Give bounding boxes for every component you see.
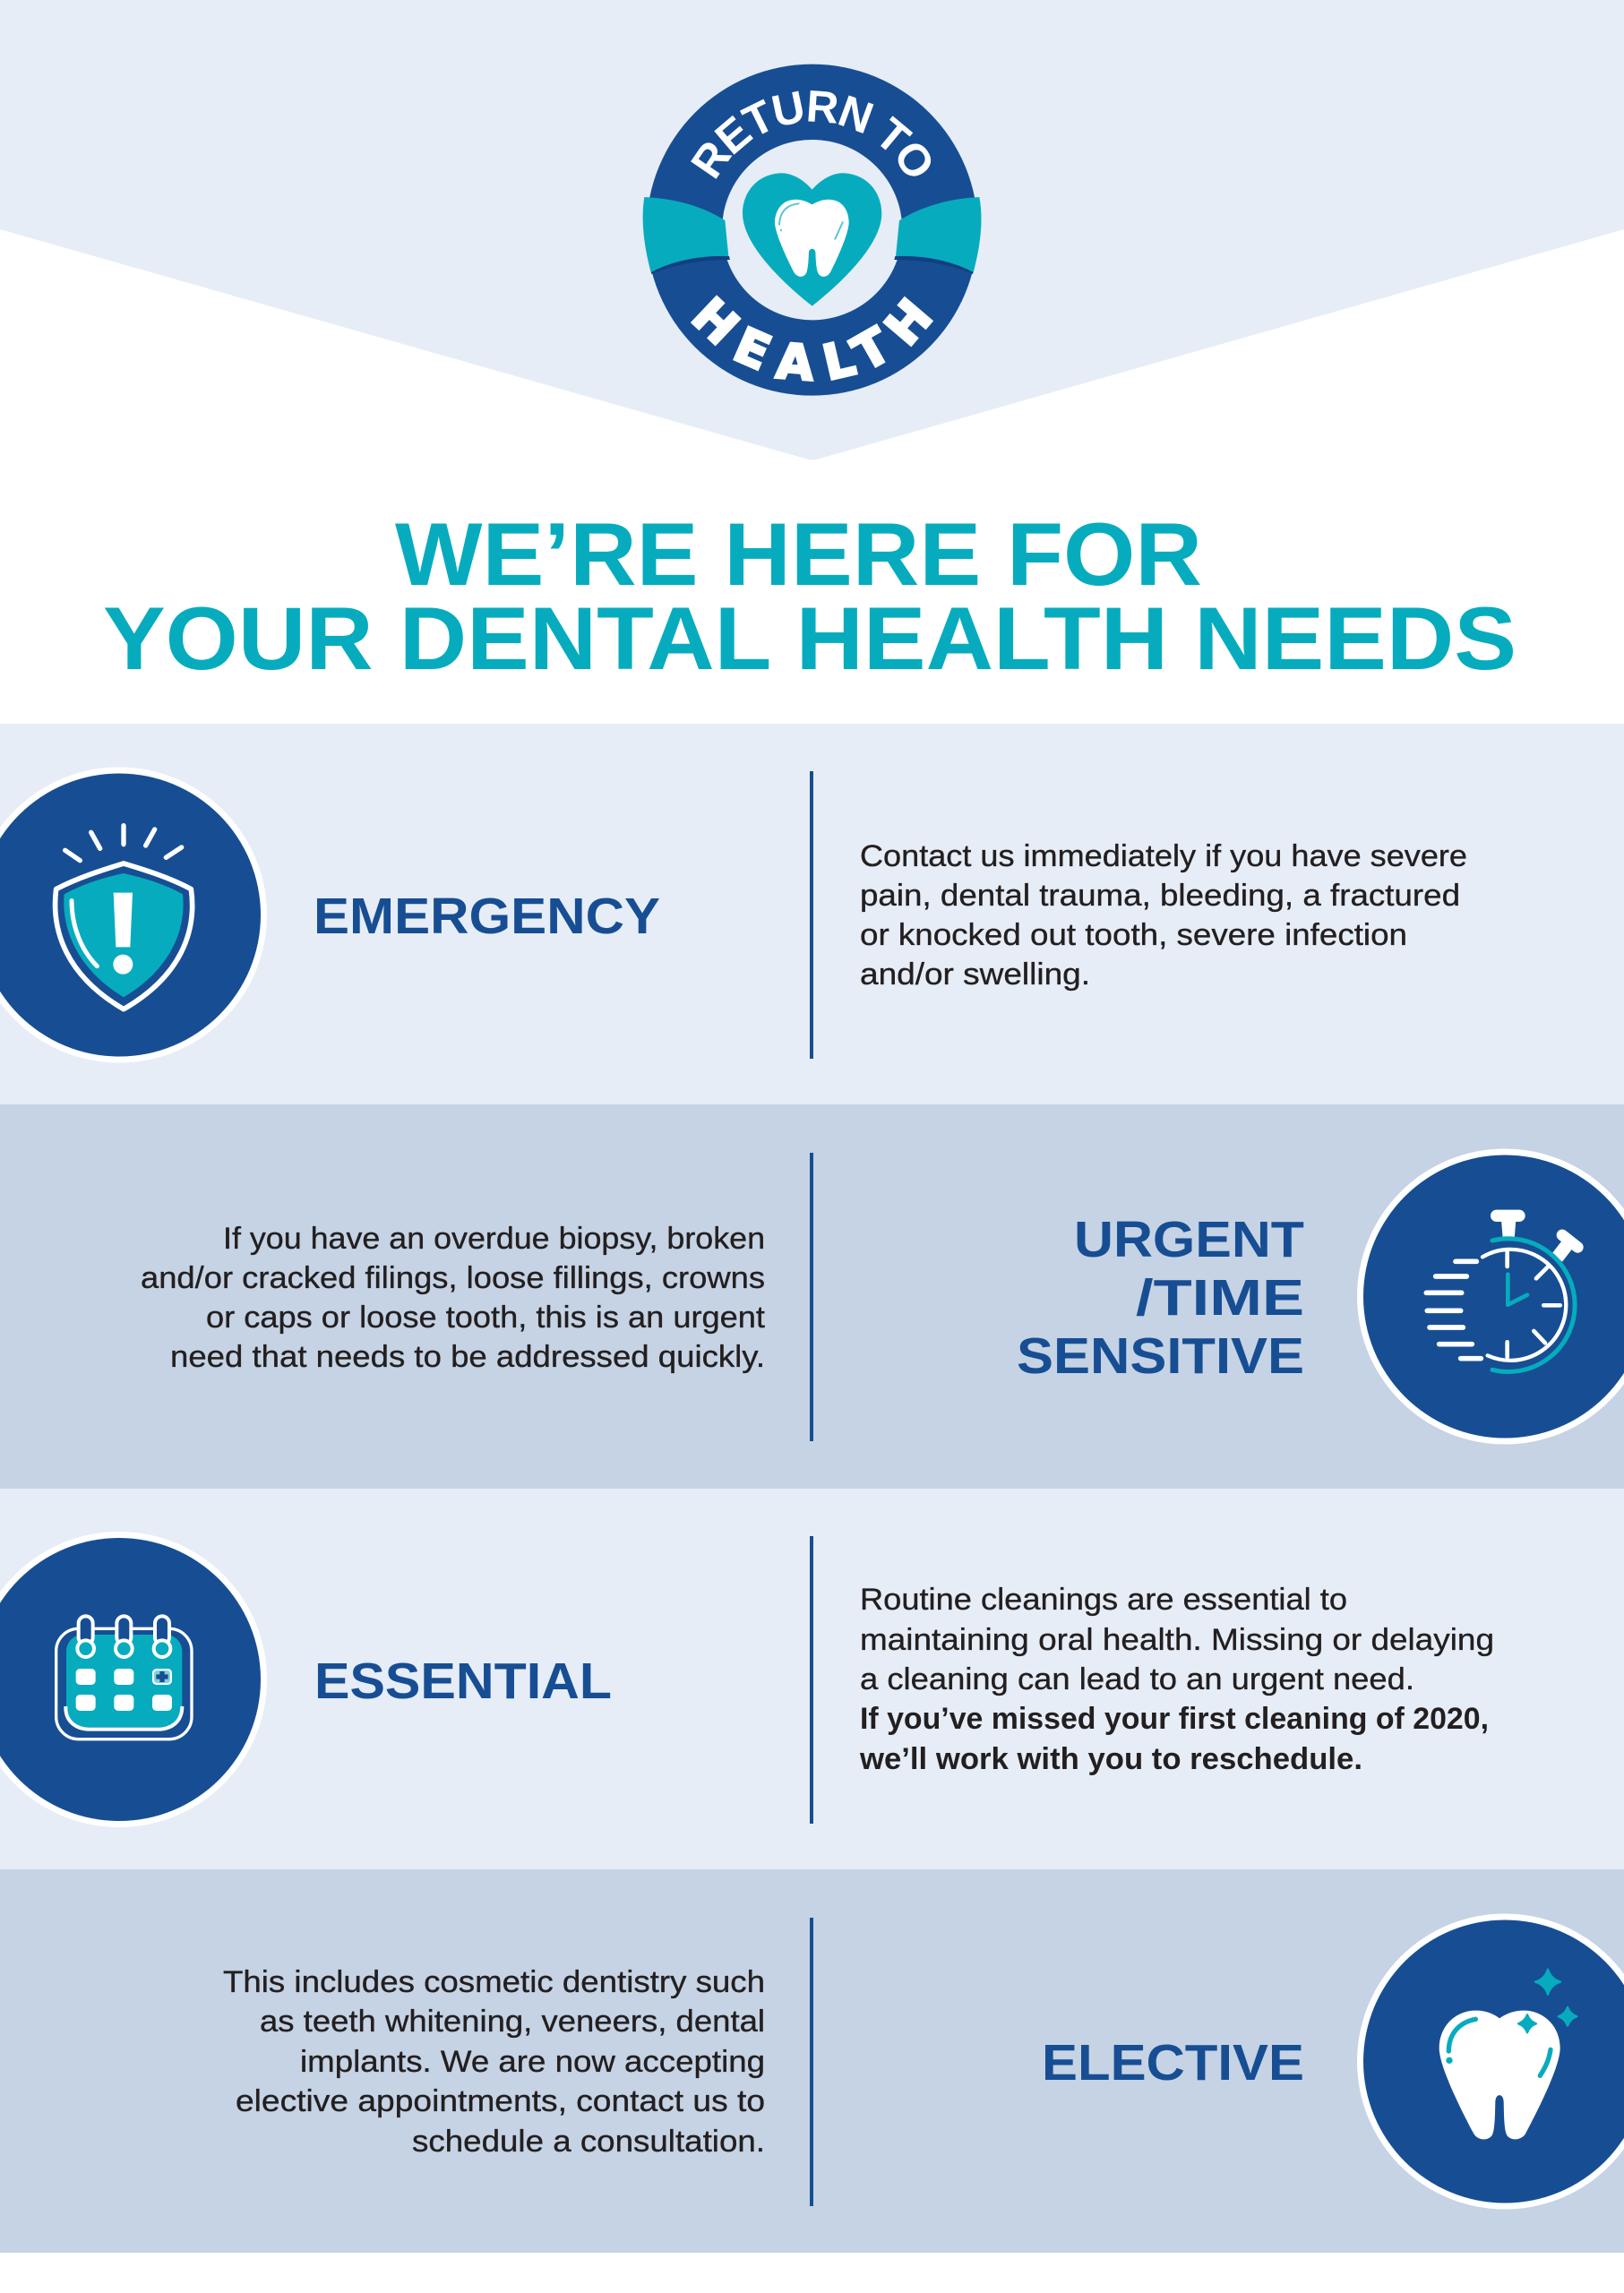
heading: urgent / time sensitive: SENSITIVE [1017,1327,1304,1385]
text: elective description [223,1965,765,2159]
icon: calendar [0,1532,267,1827]
logo text: return to: RETURN TO [691,90,932,179]
text: elective description: as teeth whitening, veneers, dental [260,2005,765,2039]
text: urgent description: and/or cracked filings, loose fillings, crowns [141,1261,765,1295]
heading: urgent / time sensitive: URGENT [1074,1211,1304,1268]
text: emergency description: Contact us immediately if you have severe [860,839,1467,873]
heading: urgent / time sensitive [1017,1211,1304,1385]
heading: essential: ESSENTIAL [314,1653,612,1710]
text: emergency description: and/or swelling. [860,958,1090,992]
text: urgent description: If you have an overdue biopsy, broken [223,1222,765,1256]
text: essential description: a cleaning can lead to an urgent need. [860,1662,1414,1696]
heading: emergency: EMERGENCY [314,888,660,945]
header chevron background [0,0,1624,460]
title [103,504,1517,688]
text: urgent description: or caps or loose tooth, this is an urgent [206,1301,766,1335]
panel: elective [0,1869,1624,2253]
text: urgent description [141,1222,766,1374]
text: emergency description: pain, dental trauma, bleeding, a fractured [860,879,1460,913]
text: essential description: we’ll work with you to reschedule. [859,1742,1362,1776]
panel: emergency [0,724,1624,1104]
text: essential description: If you’ve missed your first cleaning of 2020, [860,1702,1489,1736]
icon: shield with exclamation mark [0,767,267,1062]
panel: urgent [0,1104,1624,1489]
title: YOUR DENTAL HEALTH NEEDS [103,588,1517,688]
logo: return to health badge [643,64,982,396]
panel: essential [0,1489,1624,1869]
text: essential description [859,1583,1494,1776]
logo text: health: HEALTH [690,295,933,382]
text: elective description: implants. We are now accepting [300,2045,765,2079]
text: emergency description [860,839,1467,992]
icon: sparkling tooth [1357,1913,1624,2209]
text: elective description: elective appointments, contact us to [236,2084,765,2118]
icon: stopwatch [1357,1148,1624,1444]
text: elective description: This includes cosmetic dentistry such [223,1965,765,1999]
text: emergency description: or knocked out tooth, severe infection [860,918,1407,952]
text: essential description: maintaining oral health. Missing or delaying [860,1623,1494,1657]
text: essential description: Routine cleanings are essential to [860,1583,1347,1617]
text: urgent description: need that needs to be addressed quickly. [170,1340,765,1374]
heading: urgent / time sensitive: /TIME [1136,1269,1304,1327]
heading: elective: ELECTIVE [1042,2034,1304,2091]
title: WE’RE HERE FOR [395,504,1202,604]
text: elective description: schedule a consultation. [412,2125,765,2159]
